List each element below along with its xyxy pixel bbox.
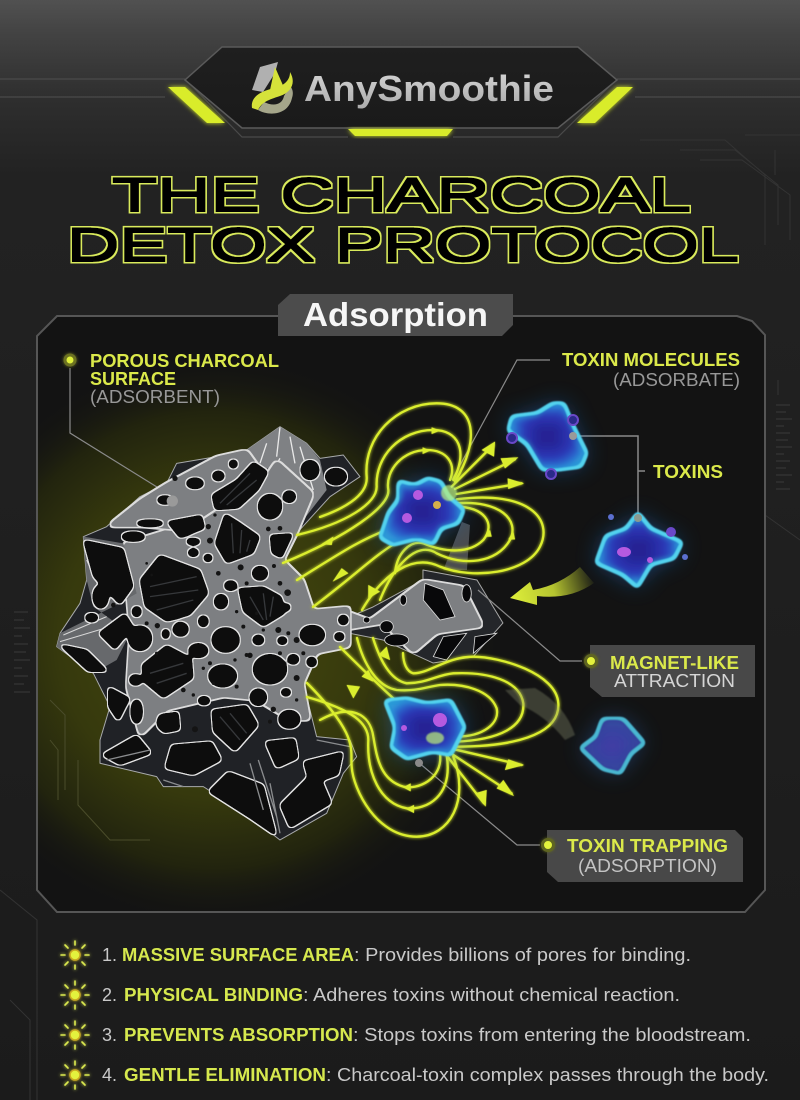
silhouette: [57, 427, 360, 840]
connector dot: [569, 432, 577, 440]
item 2: [61, 981, 680, 1009]
title: [67, 168, 739, 271]
faded swoosh: [505, 688, 575, 740]
arrow: attraction swoosh: [510, 567, 594, 605]
title: THE CHARCOAL: [112, 168, 691, 221]
callout: toxin trapping: [542, 830, 743, 882]
label: (ADSORBENT): [90, 387, 220, 407]
item 2: PHYSICAL BINDING: [124, 985, 303, 1005]
connector dot: [634, 514, 642, 522]
panel: adsorption diagram: [37, 316, 765, 912]
lower field arrowheads: [347, 647, 524, 813]
callout: toxin molecules: TOXIN MOLECULES: [562, 350, 740, 370]
leader: magnet-like: [478, 590, 582, 661]
item 3: : Stops toxins from entering the bloodstream.: [353, 1025, 751, 1045]
benefits list: [61, 941, 769, 1089]
circuit decoration inside panel: [50, 700, 150, 840]
dot: [542, 840, 554, 850]
upper field arrowheads: [322, 427, 524, 598]
callout: toxin trapping: TOXIN TRAPPING: [567, 836, 728, 856]
logo icon: [252, 62, 293, 114]
charcoal rock: [57, 427, 503, 840]
small pores: [111, 476, 305, 732]
inclusions: [402, 485, 457, 523]
callout: magnet-like attraction: [586, 645, 755, 697]
item 4: [61, 1061, 769, 1089]
leader: toxin molecules: [452, 360, 550, 480]
label: toxins: TOXINS: [653, 462, 723, 482]
arm pieces behind: [443, 522, 470, 570]
inclusions: [608, 514, 688, 563]
label: [90, 351, 279, 407]
dot: [586, 656, 596, 666]
left facets: [57, 537, 137, 673]
icon: sun: [61, 941, 89, 969]
leader: toxin trapping: [418, 762, 540, 845]
marker dot: [167, 495, 178, 507]
dot: [65, 355, 75, 365]
lower field lines: [307, 638, 558, 837]
circuit decoration: side ticks: [14, 405, 792, 692]
toxin molecule: faded: [582, 720, 643, 772]
left streaks: [60, 547, 110, 642]
leader: porous surface: [70, 368, 165, 492]
right arm web: [343, 580, 483, 653]
toxin molecule: upper right: [507, 405, 585, 479]
web: [123, 460, 350, 737]
section tab: adsorption: [278, 294, 513, 336]
item 1: [61, 941, 691, 969]
facet striations: [150, 473, 273, 740]
icon: sun: [61, 1021, 89, 1049]
item 2: : Adheres toxins without chemical reaction.: [303, 985, 680, 1005]
item 4: GENTLE ELIMINATION: [124, 1065, 326, 1085]
inclusions: [401, 713, 447, 744]
callout: porous charcoal surface: [65, 351, 279, 407]
callout: magnet-like attraction: MAGNET-LIKE: [610, 653, 739, 673]
peak streaks: [260, 427, 313, 490]
label: POROUS CHARCOAL: [90, 351, 279, 371]
header band lines: [0, 79, 800, 137]
section tab: adsorption: Adsorption: [303, 296, 488, 333]
item 3: PREVENTS ABSORPTION: [124, 1025, 353, 1045]
accent bar: right: [577, 87, 633, 123]
toxin molecule: right: [598, 514, 688, 585]
item 4: : Charcoal-toxin complex passes through the body.: [326, 1065, 769, 1085]
marker dot: [415, 759, 423, 767]
bracket: toxins: [573, 436, 645, 513]
icon: sun: [61, 1061, 89, 1089]
surface bumps: [507, 415, 578, 479]
logo plate: [168, 47, 633, 136]
callout: toxin trapping: (ADSORPTION): [578, 856, 717, 876]
rock glow: [38, 317, 764, 911]
upper field lines: [283, 403, 544, 610]
right arm: [350, 570, 503, 663]
item 3: 3.: [102, 1025, 117, 1045]
item 1: MASSIVE SURFACE AREA: [122, 945, 354, 965]
bottom streaks: [107, 740, 350, 833]
icon: sun: [61, 981, 89, 1009]
callout: magnet-like attraction: ATTRACTION: [614, 671, 735, 691]
item 1: 1.: [102, 945, 117, 965]
toxin molecule: lower: [387, 700, 463, 767]
label: SURFACE: [90, 369, 176, 389]
accent bar: bottom: [348, 129, 453, 136]
item 1: : Provides billions of pores for binding.: [354, 945, 691, 965]
callout: toxin molecules: (ADSORBATE): [613, 370, 740, 390]
toxin molecule: center top: [382, 480, 462, 543]
peak facet: [247, 427, 327, 520]
title: DETOX PROTOCOL: [67, 218, 739, 271]
web top-left: [107, 450, 263, 530]
item 2: 2.: [102, 985, 117, 1005]
callout: toxin molecules: [562, 350, 740, 390]
brand name: AnySmoothie: [304, 68, 554, 109]
dark facets: [58, 459, 349, 837]
accent bar: left: [168, 87, 225, 123]
right arm holes: [363, 583, 497, 660]
item 3: [61, 1021, 751, 1049]
item 4: 4.: [102, 1065, 117, 1085]
